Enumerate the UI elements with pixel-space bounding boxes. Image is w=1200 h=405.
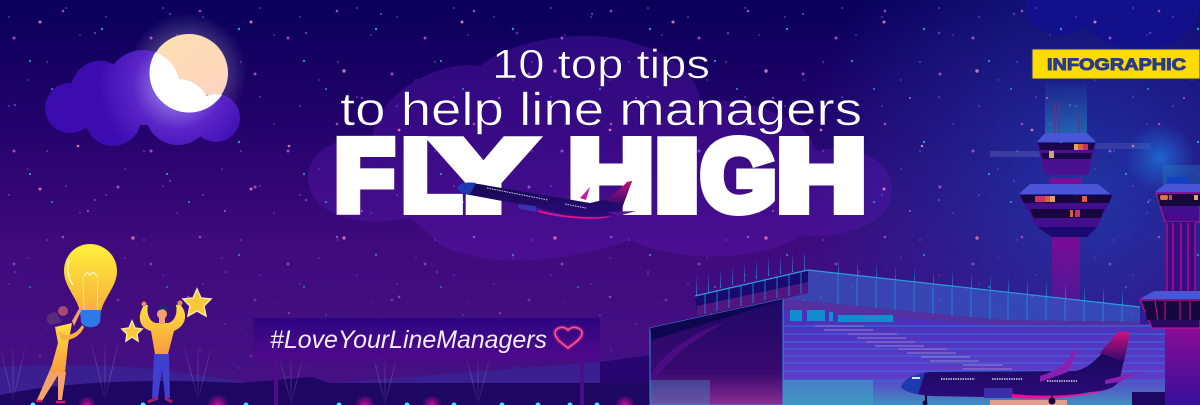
airplane in flight (457, 181, 636, 219)
spikes above roof (696, 250, 1123, 306)
headline: to help line managers: to help line managers (340, 83, 862, 135)
stars (122, 289, 211, 341)
parked airplane (901, 332, 1142, 405)
infographic tag (1032, 49, 1200, 79)
control tower right (1125, 123, 1200, 294)
headline: FLY HIGH: I (655, 120, 700, 232)
headline: 10 top tips: 10 top tips (492, 41, 710, 87)
billboard (253, 318, 600, 405)
striped front (783, 308, 1200, 405)
headline: FLY HIGH: F (335, 120, 394, 232)
infographic tag: INFOGRAPHIC (1047, 55, 1186, 74)
runway lights (30, 394, 635, 405)
light bulb (64, 244, 117, 327)
cloud with moon (45, 50, 240, 146)
lower right tower (1132, 291, 1200, 405)
hills (0, 355, 650, 405)
large background cloud behind headline (308, 36, 892, 261)
headline: FLY HIGH (335, 120, 866, 232)
icon: neon heart (555, 327, 582, 348)
headline: FLY HIGH: L (402, 120, 461, 232)
control tower left (990, 82, 1150, 327)
headline: FLY HIGH: H (777, 120, 866, 232)
headline: FLY HIGH: Y (434, 120, 532, 232)
dark block (650, 299, 783, 405)
terminal building (650, 250, 1200, 405)
light beams (0, 340, 490, 403)
headline: FLY HIGH: G (701, 120, 776, 232)
headline: FLY HIGH: H (568, 120, 654, 232)
woman (36, 306, 84, 402)
man (140, 300, 185, 402)
glass roof (783, 270, 1140, 322)
moon behind cloud (127, 13, 247, 133)
hashtag text: #LoveYourLineManagers (270, 326, 547, 354)
